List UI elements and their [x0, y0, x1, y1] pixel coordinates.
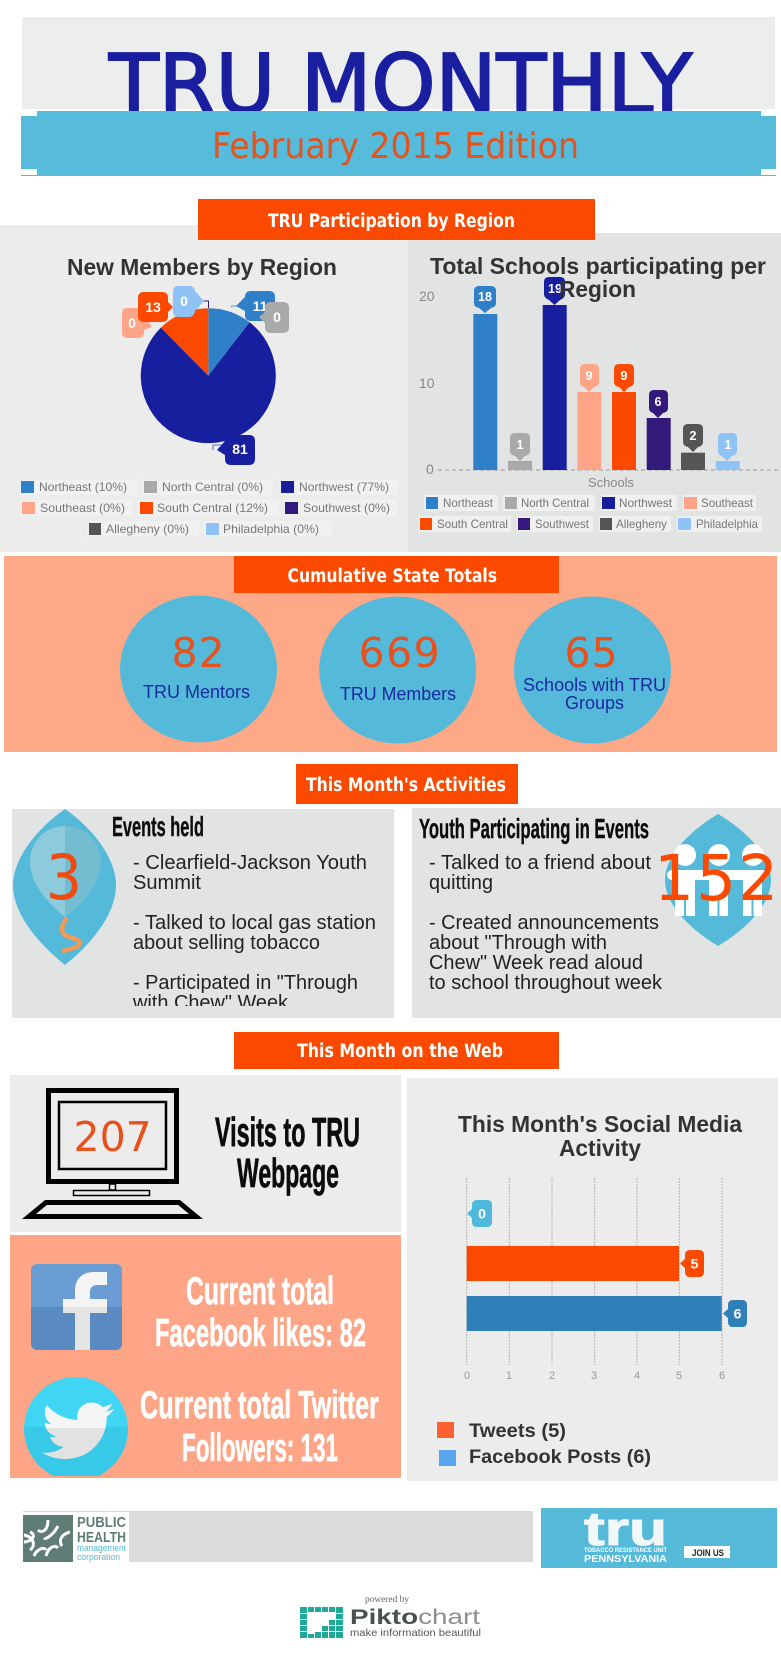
section heading: web: This Month on the Web [297, 1041, 503, 1062]
callout: north central 0 [259, 302, 289, 333]
bar chart: social media: 6 [719, 1370, 725, 1382]
footer bar: public health logo: management [77, 1543, 126, 1553]
footer bar: public health logo [23, 1511, 533, 1562]
heading: new members: New Members by Region [67, 254, 337, 280]
text: visits to TRU webpage: Webpage [237, 1150, 339, 1196]
icon: twitter [24, 1377, 128, 1481]
bar legend [419, 495, 762, 532]
bar chart: social media: 5 [676, 1370, 682, 1382]
title: TRU MONTHLY [108, 38, 693, 133]
icon: leaf with balloon and number 3 [13, 809, 116, 965]
text block: youth activities: - Created announcements [429, 912, 659, 934]
callout: southeast 9: 9 [586, 369, 593, 383]
callout: allegheny 2 [683, 424, 703, 452]
bar chart: social media: 4 [634, 1370, 640, 1382]
stat: TRU members: 669 [358, 629, 441, 677]
bar legend: Northeast [443, 496, 494, 510]
footer banner: TRU Pennsylvania [541, 1502, 777, 1568]
bar chart: social media [464, 1178, 747, 1382]
icon: computer [29, 1090, 196, 1216]
text block: event list: Summit [133, 872, 201, 894]
text block: event list: - Clearfield-Jackson Youth [133, 852, 367, 874]
social legend: Tweets (5) [469, 1421, 566, 1442]
text block: youth activities: to school throughout week [429, 972, 663, 994]
panel: cumulative state totals [4, 556, 777, 752]
icon: piktochart grid [300, 1607, 343, 1638]
heading: total schools: Region [559, 276, 636, 302]
callout: 6: 6 [734, 1306, 742, 1322]
subtitle: February 2015 Edition [212, 126, 579, 167]
section heading: participation by region [198, 199, 595, 240]
social legend: Facebook Posts (6) [469, 1447, 651, 1468]
section heading: cumulative state totals [234, 556, 559, 593]
pie legend: Southeast (0%) [40, 501, 125, 515]
text block: youth activities: Chew" Week read aloud [429, 952, 643, 974]
section heading: activities: This Month's Activities [306, 775, 506, 796]
bar legend: South Central [437, 517, 508, 531]
stat: schools with TRU groups: Schools with TRU [523, 675, 666, 695]
icon: facebook [31, 1264, 122, 1350]
social legend [437, 1421, 651, 1468]
callout: 5: 5 [691, 1256, 699, 1272]
wordmark: piktochart: Pikto chart [350, 1606, 480, 1629]
callout: north central 0: 0 [273, 309, 281, 325]
bar callouts [474, 277, 737, 461]
section heading: web [234, 1032, 559, 1069]
bar legend: Southwest [535, 517, 590, 531]
header: subtitle banner [21, 111, 776, 176]
heading: social media activity [458, 1111, 742, 1161]
pie legend: Philadelphia (0%) [223, 522, 319, 536]
footer banner: TRU Pennsylvania: PENNSYLVANIA [584, 1554, 667, 1565]
callout: southeast 0: 0 [128, 315, 136, 331]
text: facebook likes: Current total [186, 1270, 334, 1313]
axis labels: 0 [426, 461, 434, 477]
footer banner: TRU Pennsylvania: JOIN US [692, 1548, 724, 1558]
text block: youth activities: about "Through with [429, 932, 607, 954]
footer: piktochart credit [300, 1594, 481, 1639]
bar legend: Allegheny [616, 517, 667, 531]
axis title: Schools [588, 475, 634, 490]
footer bar: public health logo: PUBLIC [77, 1514, 126, 1531]
text: facebook likes: Facebook likes: 82 [155, 1312, 366, 1355]
callout: south central 13: 13 [145, 299, 161, 315]
section heading: cumulative state totals: Cumulative State Totals [288, 566, 497, 587]
callout: south central 13 [138, 292, 173, 322]
bar legend: Philadelphia [696, 517, 758, 531]
bar legend: North Central [521, 496, 589, 510]
callout: northeast 18 [474, 286, 496, 313]
callout: philadelphia 1: 1 [725, 438, 732, 452]
pie legend: North Central (0%) [162, 480, 263, 494]
heading: total schools: Total Schools participating per [430, 253, 766, 279]
icon: people in leaf with number 152 [654, 814, 780, 946]
callout: north central 1 [510, 433, 530, 461]
section heading: participation by region: TRU Participation by Region [268, 211, 515, 232]
callout: north central 1: 1 [517, 438, 524, 452]
pie legend: Allegheny (0%) [106, 522, 189, 536]
text: facebook likes [155, 1270, 366, 1355]
text block: event list [132, 852, 376, 1014]
text block: youth activities: - Talked to a friend about [429, 852, 651, 874]
text: twitter followers [140, 1384, 379, 1470]
text: visits to TRU webpage [215, 1109, 360, 1196]
callout: allegheny 2: 2 [690, 429, 697, 443]
callout: philadelphia 1 [718, 433, 737, 461]
footer: piktochart credit: powered by [365, 1594, 410, 1604]
callout: northwest 81: 81 [232, 441, 248, 457]
panel: events held [12, 809, 394, 1018]
footer banner: TRU Pennsylvania: TOBACCO RESISTANCE UNIT [584, 1548, 667, 1554]
panel: total schools per region [408, 233, 781, 552]
heading: social media activity: This Month's Social Media [458, 1111, 742, 1137]
callout: southwest 6: 6 [655, 395, 662, 409]
heading: social media activity: Activity [559, 1135, 641, 1161]
panel: new members by region [0, 225, 408, 552]
panel: webpage visits [10, 1075, 401, 1232]
tagline: make information beautiful [350, 1627, 481, 1639]
callout: 0 [467, 1200, 492, 1227]
axis labels: 20 [419, 288, 435, 304]
text block: event list: with Chew" Week [132, 992, 289, 1014]
icon: people in leaf with number 152: 152 [654, 842, 780, 915]
callout: northwest 19: 19 [548, 282, 562, 296]
footer bar: public health logo: HEALTH [77, 1529, 126, 1546]
callout: philadelphia 0: 0 [180, 293, 188, 309]
panel: youth participating [412, 808, 781, 1018]
stat: schools with TRU groups [514, 596, 671, 744]
stat: TRU members [319, 596, 476, 744]
callout: 0: 0 [478, 1206, 486, 1222]
callout: northeast 11 [236, 291, 275, 321]
axis labels: 10 [419, 375, 435, 391]
header: title panel [22, 17, 775, 133]
callout: philadelphia 0 [173, 286, 204, 317]
text block: event list: - Participated in "Through [133, 972, 358, 994]
bar legend: Northwest [619, 496, 673, 510]
callout: 5 [680, 1250, 704, 1277]
text: twitter followers: Followers: 131 [182, 1427, 338, 1470]
stat: TRU mentors: 82 [172, 629, 226, 677]
pie legend: South Central (12%) [157, 501, 268, 515]
text block: event list: - Talked to local gas station [133, 912, 376, 934]
heading: total schools [430, 253, 766, 302]
callout: southeast 0 [122, 308, 152, 338]
bar legend: Southeast [701, 496, 754, 510]
panel: social totals [10, 1235, 401, 1481]
text block: youth activities: quitting [429, 872, 493, 894]
panel: social media activity [407, 1078, 778, 1481]
heading: events held: Events held [112, 811, 204, 842]
pie legend: Northeast (10%) [39, 480, 127, 494]
callout: northeast 11: 11 [253, 298, 268, 314]
callout: northeast 18: 18 [478, 290, 492, 304]
stat: schools with TRU groups: 65 [564, 629, 619, 677]
footer banner: TRU Pennsylvania: tru [584, 1502, 667, 1555]
stat: TRU mentors [120, 596, 277, 742]
pie chart [141, 308, 276, 443]
text block: youth activities [429, 852, 663, 994]
text block: event list: about selling tobacco [133, 932, 320, 954]
bar chart: social media: 0 [464, 1370, 470, 1382]
stat: schools with TRU groups: Groups [565, 693, 624, 713]
footer bar: public health logo: corporation [77, 1552, 120, 1562]
pie legend: Southwest (0%) [303, 501, 390, 515]
callout: northwest 81 [217, 435, 255, 465]
bar chart: social media: 3 [591, 1370, 597, 1382]
callout: southeast 9 [580, 364, 599, 392]
stat: TRU members: TRU Members [340, 684, 456, 704]
callout: 6 [723, 1300, 747, 1327]
bar chart: social media: 2 [549, 1370, 555, 1382]
text: twitter followers: Current total Twitter [140, 1384, 379, 1427]
bar chart [473, 305, 740, 470]
number: 207 visits: 207 [74, 1113, 152, 1161]
icon: leaf with balloon and number 3: 3 [46, 841, 82, 914]
bar chart: social media: 1 [506, 1370, 512, 1382]
callout: southwest 6 [649, 390, 668, 418]
pie legend [20, 479, 398, 537]
stat: TRU mentors: TRU Mentors [143, 682, 250, 702]
axis labels [419, 288, 435, 477]
text: visits to TRU webpage: Visits to TRU [215, 1109, 360, 1155]
section heading: activities [296, 764, 518, 804]
callout: northwest 19 [544, 277, 565, 305]
pie callouts [122, 286, 289, 465]
callout: south central 9: 9 [621, 369, 628, 383]
callout: south central 9 [614, 364, 634, 392]
pie legend: Northwest (77%) [299, 480, 389, 494]
